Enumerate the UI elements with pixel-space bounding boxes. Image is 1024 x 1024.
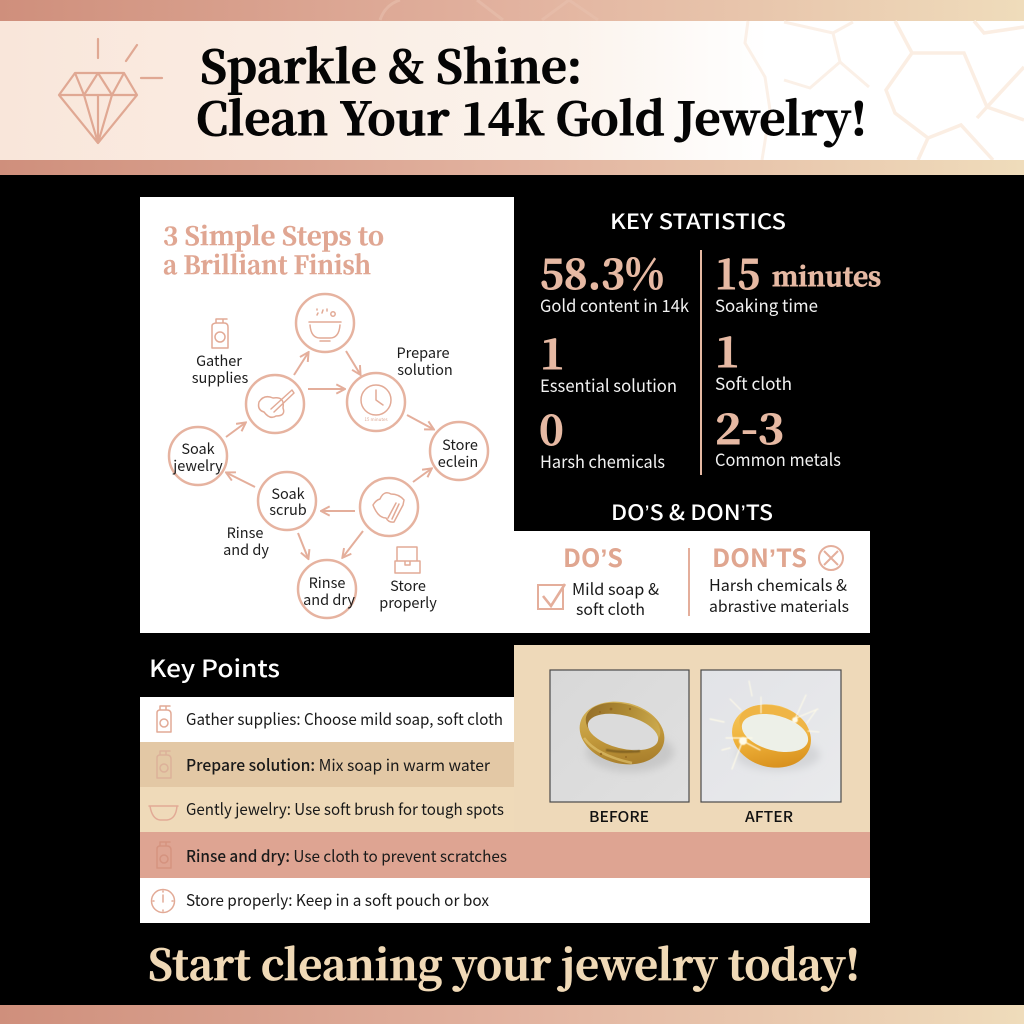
label: gather supplies: Gather [196, 350, 242, 371]
step: soak scrub circle: Soak [271, 483, 305, 504]
icon: x circle [819, 546, 843, 570]
bottom gradient band [0, 1005, 1024, 1024]
don'ts: Harsh chemicals & [709, 572, 847, 596]
row: rinse and dry [140, 832, 870, 878]
photo: after ring [701, 670, 841, 802]
stat: soft cloth: Soft cloth [715, 370, 792, 395]
label: store properly: Store [390, 575, 426, 596]
stat: soft cloth [715, 320, 792, 395]
icon: diamond [59, 39, 162, 143]
step: store clean circle: eclein [438, 451, 478, 472]
stat: common metals: 2-3 [715, 397, 784, 457]
panel: before and after [514, 645, 870, 833]
stat: common metals: Common metals [715, 446, 841, 471]
header banner [0, 21, 1024, 160]
lower header band [0, 160, 1024, 175]
stat: soaking time: 15 [715, 242, 760, 302]
step: soak jewelry circle: Soak [181, 438, 215, 459]
step: cloth circle [360, 478, 418, 536]
stat: common metals [715, 397, 841, 471]
step: rinse circle: and dry [303, 589, 355, 610]
step: soak scrub circle [258, 472, 316, 530]
label: rinse and dy: and dy [223, 539, 269, 560]
step: rinse circle [298, 560, 356, 618]
call to action: Start cleaning your jewelry today! [148, 933, 860, 993]
step: brush circle [246, 375, 304, 433]
title: Sparkle & Shine: [200, 31, 582, 96]
heading: key statistics: KEY STATISTICS [610, 206, 786, 236]
cycle arrows [226, 351, 433, 558]
do's: soft cloth [576, 596, 645, 620]
row: gently jewelry [140, 787, 514, 832]
step: soak scrub circle: scrub [269, 499, 307, 520]
stat: harsh chemicals: Harsh chemicals [540, 448, 665, 473]
stat: soft cloth: 1 [715, 320, 740, 380]
row: prepare solution: Prepare solution: Mix soap in warm water [186, 752, 491, 776]
step: bowl circle [296, 294, 354, 352]
heading: do's and don'ts: DO’S & DON ’TS [611, 497, 773, 527]
icon: storage box [395, 547, 420, 573]
panel: steps cycle [140, 197, 514, 633]
don'ts [709, 539, 849, 617]
row: gather supplies [140, 697, 514, 742]
label: rinse and dy: Rinse [227, 522, 263, 543]
icon: soap bottle [212, 319, 228, 348]
title: Clean Your 14k Gold Jewelry! [196, 83, 867, 148]
row: rinse and dry: Rinse and dry: Use cloth to prevent scratches [186, 843, 507, 867]
photo: before ring [550, 670, 689, 802]
stat: soaking time [715, 242, 881, 317]
heading: key points: Key Points [149, 649, 280, 684]
label: after: AFTER [745, 806, 793, 827]
step: store clean circle [430, 422, 488, 480]
label: store properly: properly [379, 592, 437, 613]
heading: steps: a Brilliant Finish [163, 246, 371, 282]
stat: gold content: Gold content in 14k [540, 292, 690, 317]
don'ts: abrastive materials [709, 593, 849, 617]
stat: soaking time: Soaking time [715, 292, 818, 317]
step: clock circle: 15 minutes [364, 416, 388, 423]
label: prepare solution: Prepare [396, 342, 450, 363]
stat: essential solution: Essential solution [540, 372, 677, 397]
label: before: BEFORE [589, 806, 649, 827]
sparkles [710, 681, 819, 769]
stat: soaking time: minutes [772, 257, 881, 294]
stat: gold content [540, 242, 690, 317]
do's: Mild soap & [572, 576, 659, 600]
do's [538, 539, 659, 620]
label: prepare solution: solution [397, 359, 453, 380]
stat: gold content: 58.3% [540, 242, 664, 302]
row: store properly [140, 878, 870, 923]
do's: DO’S [563, 539, 623, 575]
row: store properly: Store properly: Keep in a soft pouch or box [186, 887, 489, 911]
step: soak jewelry circle: jewelry [172, 455, 223, 476]
step: clock circle [347, 373, 405, 431]
step: store clean circle: Store [442, 434, 478, 455]
stat: essential solution [540, 322, 677, 397]
step: soak jewelry circle [169, 427, 227, 485]
top gradient band [0, 0, 1024, 21]
panel: statistics [539, 242, 881, 475]
icon: checkbox [538, 584, 565, 609]
label: gather supplies: supplies [192, 367, 248, 388]
row: gently jewelry: Gently jewelry: Use soft brush for tough spots [186, 796, 504, 820]
row: prepare solution [140, 742, 514, 787]
panel: do's and don'ts [514, 531, 870, 633]
row: gather supplies: Gather supplies: Choose mild soap, soft cloth [186, 706, 503, 730]
stat: harsh chemicals [539, 398, 665, 473]
stat: essential solution: 1 [540, 322, 565, 382]
panel: key points list [140, 697, 870, 923]
don'ts: DON’TS [712, 539, 807, 575]
heading: steps: 3 Simple Steps to [163, 217, 384, 253]
stat: harsh chemicals: 0 [539, 398, 564, 458]
step: rinse circle: Rinse [309, 572, 345, 593]
